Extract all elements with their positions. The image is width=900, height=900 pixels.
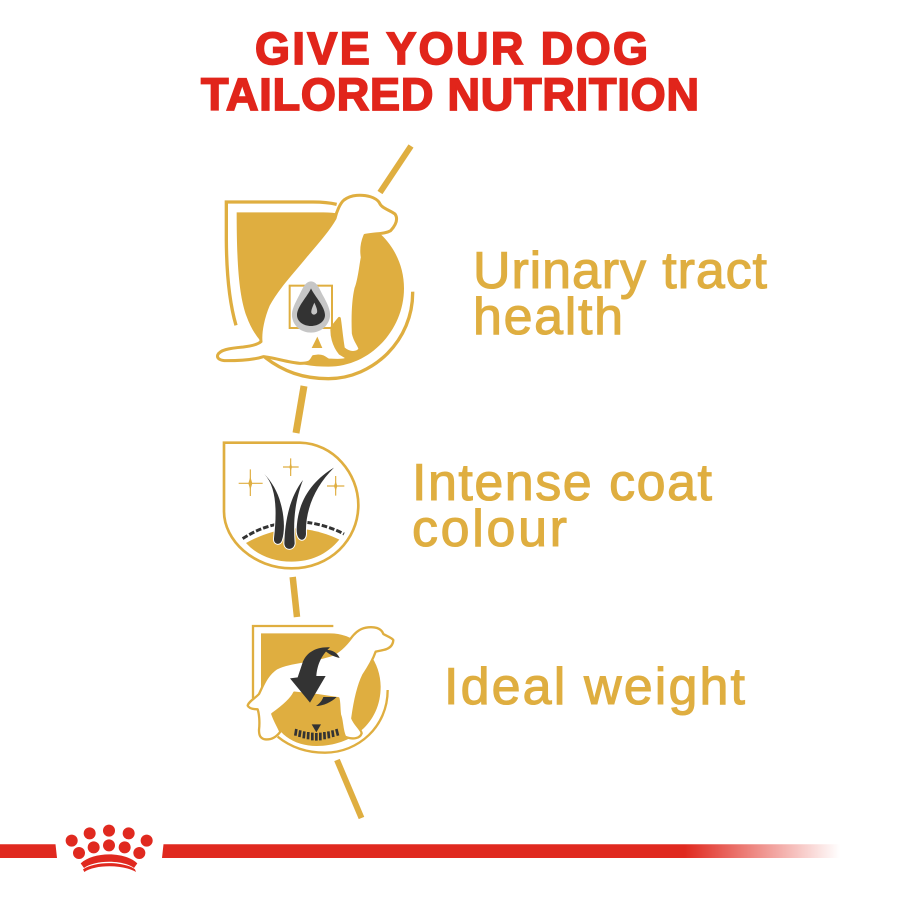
icon: ideal weight dog shield bbox=[248, 626, 393, 753]
icon: coat shield bbox=[224, 443, 358, 568]
text: intense coat colour: colour bbox=[412, 500, 567, 558]
text: urinary tract health bbox=[473, 242, 768, 346]
text: urinary tract health: health bbox=[473, 288, 623, 346]
footer red bar right fading bbox=[162, 844, 840, 858]
icon: royal crown logo bbox=[66, 825, 153, 872]
text: intense coat colour bbox=[412, 454, 713, 558]
text: urinary tract health: Urinary tract bbox=[473, 242, 768, 300]
icon: urinary tract dog shield bbox=[217, 195, 413, 379]
footer red bar left bbox=[0, 844, 57, 858]
title bbox=[201, 23, 699, 120]
text: ideal weight: Ideal weight bbox=[444, 658, 746, 716]
title: TAILORED NUTRITION bbox=[201, 69, 699, 120]
text: intense coat colour: Intense coat bbox=[412, 454, 713, 512]
connecting curved line bbox=[293, 146, 411, 818]
title: GIVE YOUR DOG bbox=[255, 23, 648, 74]
